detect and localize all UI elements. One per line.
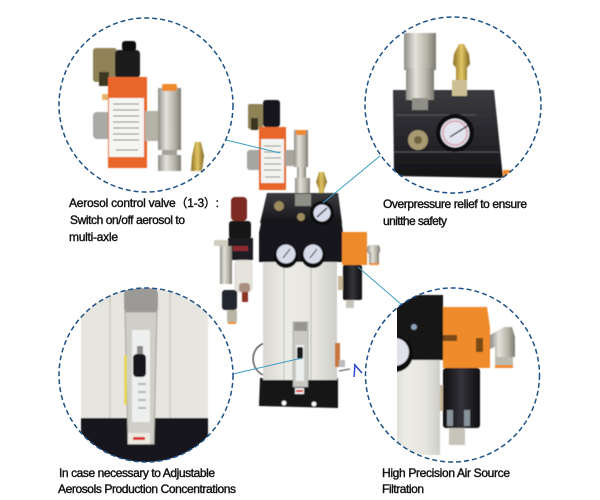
text: flow adjustment xyxy=(58,466,236,496)
text: flow adjustment: In case necessary to Adjustable xyxy=(59,466,215,480)
leader lines xyxy=(226,140,402,374)
text: aerosol control valve: Switch on/off aerosol to xyxy=(70,213,185,227)
icon: control valve close-up xyxy=(93,41,204,171)
text: air source filtration xyxy=(382,466,510,496)
regulator assembly xyxy=(214,197,253,324)
text: aerosol control valve: Aerosol control valve（1-3）: xyxy=(69,196,219,210)
panel: aerosol control valve xyxy=(59,18,233,192)
text: overpressure relief xyxy=(383,197,527,228)
flow meter xyxy=(293,322,308,394)
central machine xyxy=(214,100,380,408)
black cable xyxy=(253,343,265,375)
small control valve xyxy=(247,100,310,196)
panel: flow adjustment xyxy=(59,285,233,468)
text: overpressure relief: Overpressure relief to ensure xyxy=(383,197,527,211)
panel: air source filtration xyxy=(366,288,540,462)
air filter unit xyxy=(338,232,380,308)
top gauge xyxy=(310,201,334,225)
top manifold block xyxy=(259,193,343,262)
text: overpressure relief: unitthe safety xyxy=(383,214,447,228)
icon: gauge on block close-up xyxy=(393,33,513,178)
text: air source filtration: High Precision Air Source xyxy=(382,466,510,480)
base plate xyxy=(259,350,338,408)
aluminium column xyxy=(263,260,337,380)
panel: overpressure relief xyxy=(365,17,541,193)
infographic xyxy=(58,16,542,494)
side fittings xyxy=(335,343,350,371)
text: flow adjustment: Aerosols Production Concentrations xyxy=(58,482,236,496)
blue scribble xyxy=(354,364,362,377)
icon: flow meter close-up xyxy=(81,285,208,468)
text: air source filtration: Filtration xyxy=(382,482,424,496)
small brass relief valve xyxy=(316,172,327,198)
icon: air filter close-up xyxy=(397,294,516,456)
text: aerosol control valve xyxy=(69,196,219,244)
twin gauges xyxy=(274,244,325,268)
text: aerosol control valve: multi-axle xyxy=(69,230,118,244)
